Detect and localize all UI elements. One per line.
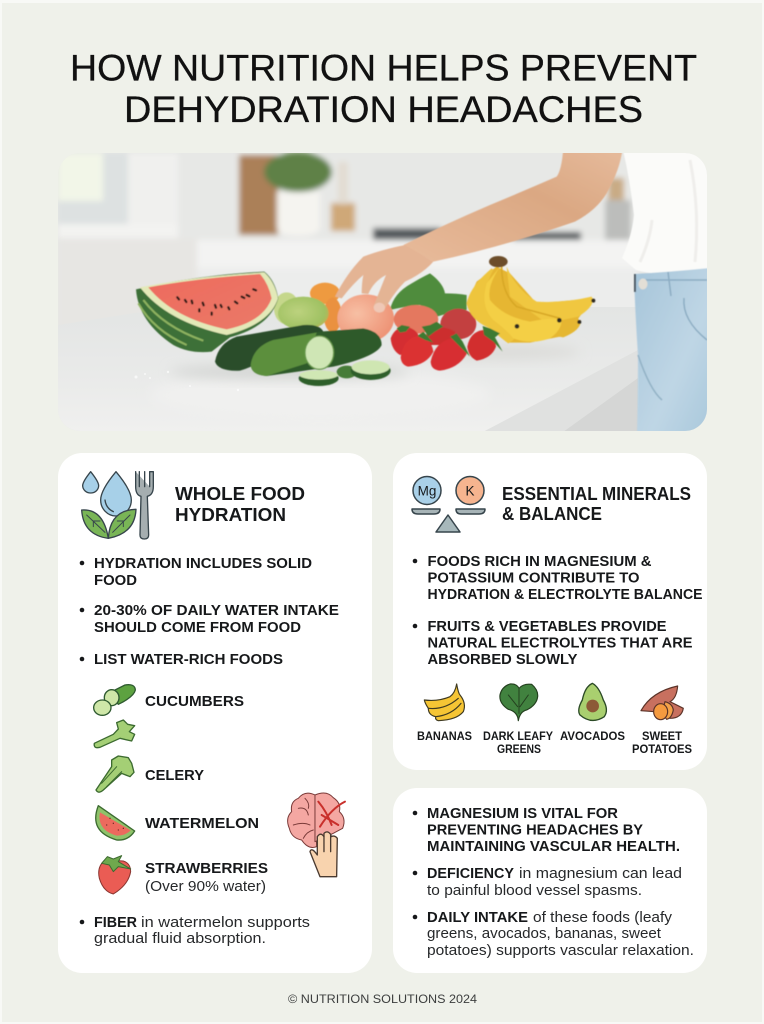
- footer: © NUTRITION SOLUTIONS 2024: [288, 994, 478, 1006]
- title: DEHYDRATION HEADACHES: [124, 89, 643, 130]
- bullet list: minerals: FRUITS & VEGETABLES PROVIDE: [428, 619, 667, 635]
- panel: magnesium and headaches: [393, 788, 707, 973]
- labels: mineral-rich foods: AVOCADOS: [560, 729, 625, 743]
- bullet: deficiency: to painful blood vessel spasms.: [427, 883, 642, 899]
- icon: brain with hand: [288, 793, 345, 877]
- heading: essential minerals and balance: ESSENTIAL MINERALS: [502, 483, 691, 504]
- bullet: daily intake: greens, avocados, bananas, sweet: [427, 926, 661, 942]
- strawberries: [391, 322, 503, 371]
- icon: balance scale with Mg and K: Mg: [418, 484, 436, 498]
- arm and hand: [335, 148, 623, 313]
- bullet: fiber note: in watermelon supports: [141, 915, 310, 931]
- bullet list: hydration facts: LIST WATER-RICH FOODS: [94, 652, 283, 668]
- bullet list: hydration facts: HYDRATION INCLUDES SOLID: [94, 556, 312, 572]
- green leafy vegetables: [390, 273, 467, 317]
- labels: mineral-rich foods: POTATOES: [632, 742, 692, 756]
- oranges and green apple: [274, 283, 342, 332]
- heading: whole food hydration: [175, 483, 305, 525]
- list: water-rich foods: CELERY: [145, 767, 204, 784]
- bullet list: minerals: HYDRATION & ELECTROLYTE BALANCE: [428, 587, 703, 603]
- labels: mineral-rich foods: [417, 729, 692, 756]
- bullet list: minerals: POTASSIUM CONTRIBUTE TO: [428, 570, 640, 586]
- peach and red apples: [337, 294, 476, 342]
- bullet: daily intake: potatoes) supports vascular relaxation.: [427, 943, 694, 959]
- icon: water drops, leaves and fork: [82, 472, 153, 539]
- labels: mineral-rich foods: BANANAS: [417, 729, 472, 743]
- icon: avocado: [579, 683, 606, 720]
- watermelon: [136, 272, 278, 352]
- icon: strawberry: [99, 856, 131, 894]
- bullet: daily intake: of these foods (leafy: [533, 910, 673, 926]
- cucumbers: [215, 325, 391, 386]
- bullet: magnesium is vital: [413, 806, 680, 855]
- bullet: magnesium is vital: MAINTAINING VASCULAR HEALTH.: [427, 839, 680, 855]
- labels: mineral-rich foods: SWEET: [642, 729, 683, 743]
- bullet: deficiency: in magnesium can lead: [519, 866, 682, 882]
- heading: essential minerals and balance: [502, 483, 691, 524]
- icon: celery sprig: [94, 720, 135, 748]
- icon: bananas: [424, 684, 464, 721]
- list: water-rich foods: WATERMELON: [145, 815, 259, 832]
- bullet list: minerals: [413, 554, 703, 668]
- icon: balance scale with Mg and K: [412, 476, 485, 532]
- bullet list: minerals: ABSORBED SLOWLY: [428, 652, 578, 668]
- icon: balance scale with Mg and K: K: [465, 484, 475, 498]
- list: water-rich foods: [145, 693, 268, 895]
- panel: essential minerals and balance: [393, 453, 707, 770]
- bullet list: hydration facts: FOOD: [94, 573, 137, 589]
- bullet: fiber note: gradual fluid absorption.: [94, 931, 266, 947]
- icon: watermelon slice: [96, 806, 135, 840]
- bullet: daily intake: DAILY INTAKE: [427, 910, 528, 926]
- shirt: [622, 150, 710, 274]
- bullet: deficiency: DEFICIENCY: [427, 866, 514, 882]
- photo: kitchen counter with fruit and vegetables: [58, 148, 710, 435]
- bullet list: hydration facts: 20-30% OF DAILY WATER INTAKE: [94, 603, 339, 619]
- bullet list: hydration facts: SHOULD COME FROM FOOD: [94, 620, 301, 636]
- title: [70, 48, 697, 130]
- bullet: fiber note: [80, 915, 310, 947]
- list: water-rich foods: STRAWBERRIES: [145, 860, 268, 877]
- icon: sweet potatoes: [641, 686, 683, 720]
- heading: essential minerals and balance: & BALANCE: [502, 503, 602, 524]
- heading: whole food hydration: HYDRATION: [175, 504, 286, 525]
- title: HOW NUTRITION HELPS PREVENT: [70, 48, 697, 88]
- icon: celery: [96, 756, 134, 792]
- bullet: magnesium is vital: PREVENTING HEADACHES BY: [427, 822, 643, 838]
- bullet list: minerals: NATURAL ELECTROLYTES THAT ARE: [428, 636, 693, 652]
- bullet: magnesium is vital: MAGNESIUM IS VITAL FOR: [427, 806, 619, 822]
- bullet: fiber note: FIBER: [94, 915, 138, 931]
- list: water-rich foods: (Over 90% water): [145, 879, 266, 895]
- panel: whole food hydration: [58, 453, 372, 973]
- icon: dark leafy greens: [500, 684, 538, 721]
- jeans: [634, 268, 710, 435]
- bullet: deficiency: [413, 866, 682, 899]
- labels: mineral-rich foods: GREENS: [497, 742, 541, 756]
- reflection and shadows on counter: [150, 370, 490, 420]
- bullet list: hydration facts: [80, 556, 339, 668]
- bullet: daily intake: [413, 910, 694, 959]
- bananas: [467, 256, 595, 343]
- counter top: [58, 307, 640, 432]
- icon: cucumber: [94, 685, 135, 715]
- labels: mineral-rich foods: DARK LEAFY: [483, 729, 553, 743]
- bullet list: minerals: FOODS RICH IN MAGNESIUM &: [428, 554, 652, 570]
- counter edge and cabinet: [509, 362, 616, 418]
- heading: whole food hydration: WHOLE FOOD: [175, 483, 305, 504]
- list: water-rich foods: CUCUMBERS: [145, 693, 244, 710]
